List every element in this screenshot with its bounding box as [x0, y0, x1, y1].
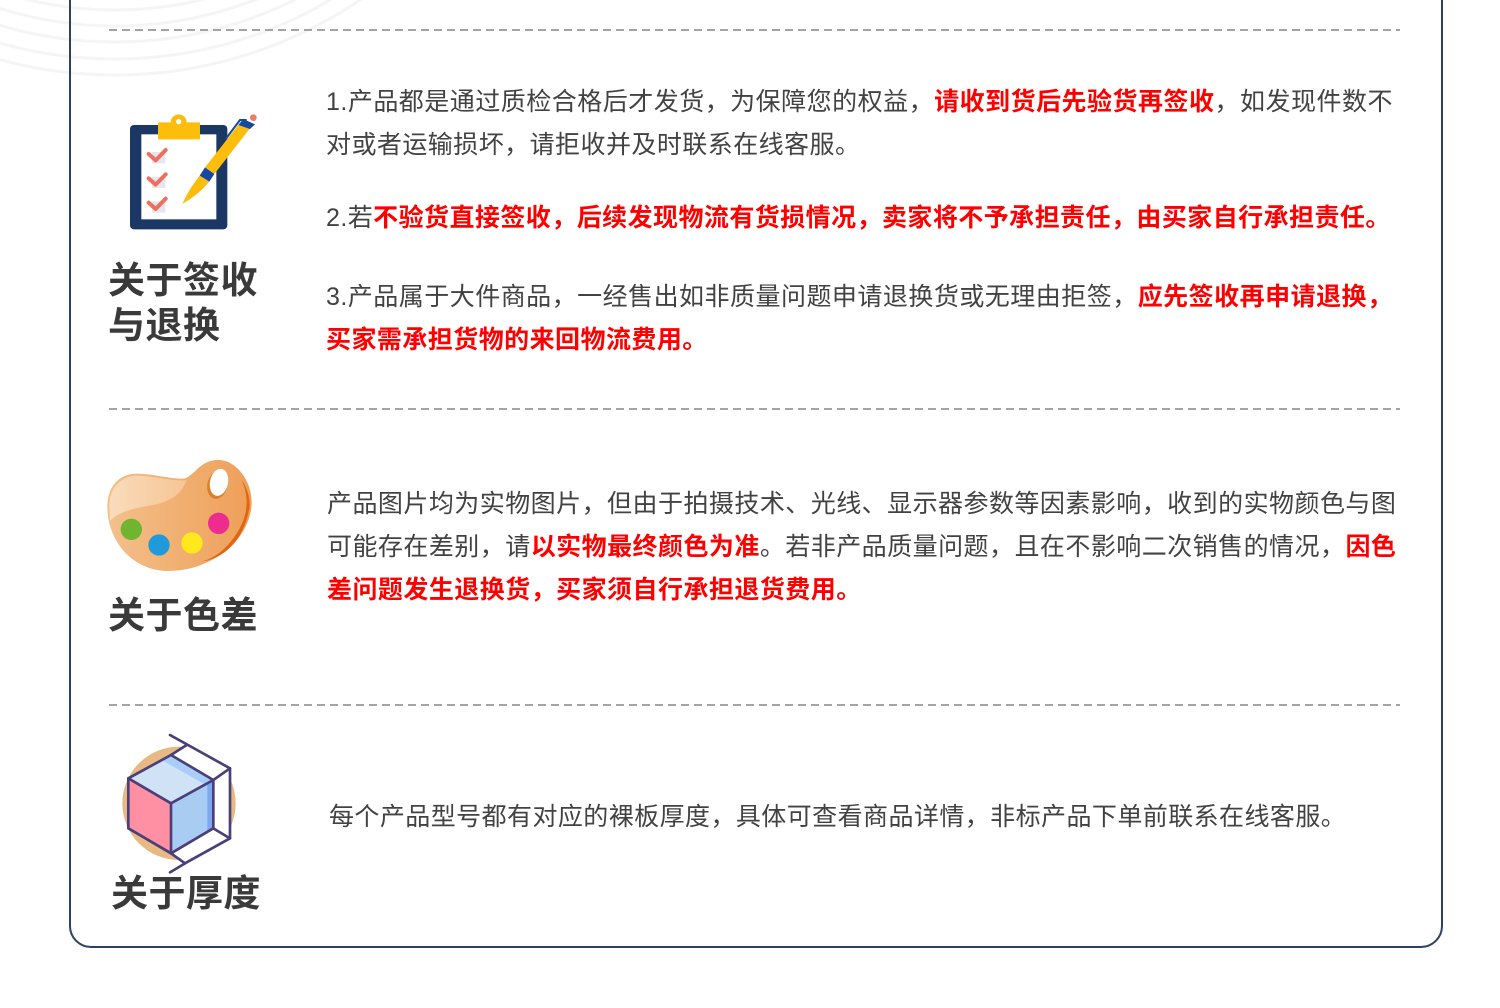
text block: signing terms: 1.产品都是通过质检合格后才发货，为保障您的权益，请收到货后先验货再签收，如发现件数不: [326, 88, 1393, 116]
text block: colour difference terms: 可能存在差别，请以实物最终颜色为准。若非产品质量问题，且在不影响二次销售的情况，因色: [327, 533, 1396, 561]
icon: thickness cube: [122, 734, 236, 874]
heading: 关于色差: 关于色差: [108, 595, 258, 636]
text block: colour difference terms: 差问题发生退换货，买家须自行承担退货费用。: [327, 576, 862, 604]
icon: paint palette: [107, 460, 252, 571]
heading: 关于签收与退换: 关于签收: [108, 260, 258, 301]
heading: 关于签收与退换: 与退换: [108, 305, 220, 346]
text block: signing terms: 2.若不验货直接签收，后续发现物流有货损情况，卖家将不予承担责任，由买家自行承担责任。: [326, 204, 1391, 232]
text block: signing terms: [326, 88, 1393, 354]
icon: clipboard and pen: [130, 114, 257, 230]
text block: signing terms: 3.产品属于大件商品，一经售出如非质量问题申请退换货或无理由拒签，应先签收再申请退换，: [326, 283, 1393, 311]
text block: thickness terms: 每个产品型号都有对应的裸板厚度，具体可查看商品详情，非标产品下单前联系在线客服。: [329, 803, 1346, 831]
text block: colour difference terms: 产品图片均为实物图片，但由于拍摄技术、光线、显示器参数等因素影响，收到的实物颜色与图: [327, 490, 1396, 518]
text block: signing terms: 对或者运输损坏，请拒收并及时联系在线客服。: [326, 131, 860, 159]
text block: colour difference terms: [327, 490, 1396, 604]
text block: signing terms: 买家需承担货物的来回物流费用。: [326, 326, 708, 354]
heading: 关于厚度: 关于厚度: [111, 873, 261, 914]
heading: 关于签收与退换: [108, 260, 258, 346]
